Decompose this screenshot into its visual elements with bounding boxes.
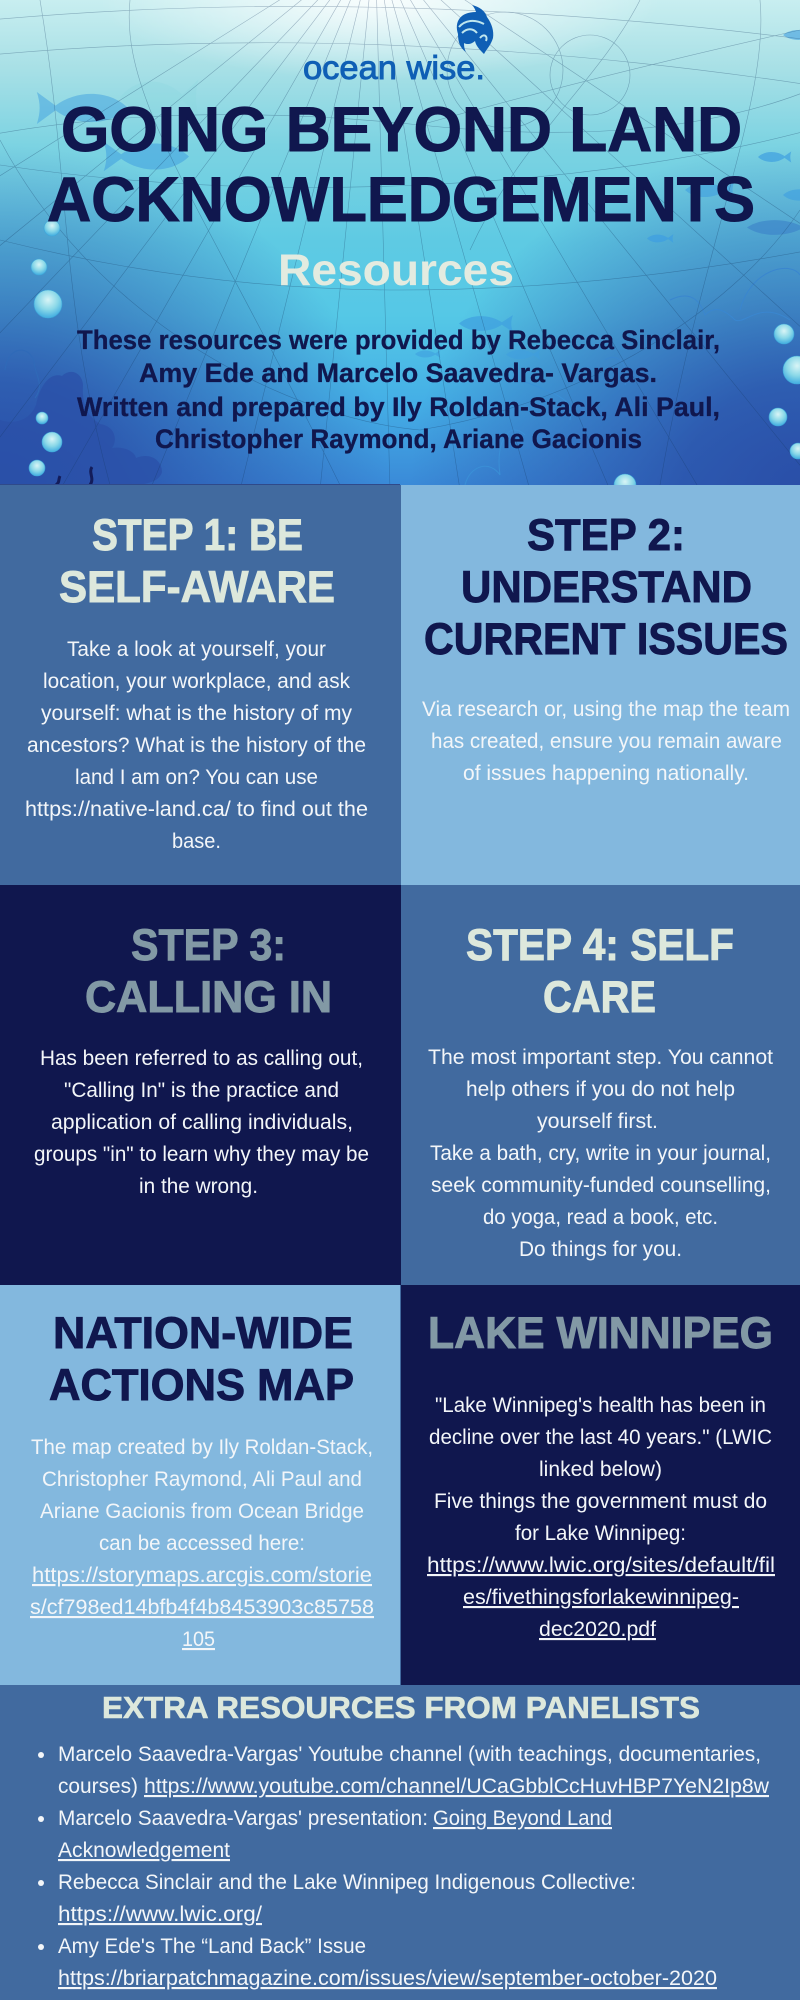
title: ACKNOWLEDGEMENTS [47, 165, 755, 235]
heading: step 3 [85, 921, 332, 1022]
body text: map description and link: Christopher Raymond, Ali Paul and [42, 1467, 362, 1491]
heading: step 3: CALLING IN [85, 973, 332, 1022]
heading: step 1: SELF-AWARE [59, 563, 335, 612]
bullet list of resources: Marcelo Saavedra-Vargas' presentation: [58, 1806, 428, 1830]
body text: step 4: seek community-funded counselling, [431, 1173, 771, 1197]
body text: map description and link: The map created by Ily Roldan-Stack, [31, 1435, 373, 1459]
body text: step 1: yourself: what is the history of my [41, 701, 352, 725]
body text: lake winnipeg [427, 1393, 775, 1641]
body text: map description and link: s/cf798ed14bfb4f4b8453903c85758 [30, 1595, 374, 1619]
heading: lake winnipeg: LAKE WINNIPEG [428, 1309, 773, 1358]
heading: step 4: STEP 4: SELF [466, 921, 734, 970]
body text: step 1: Take a look at yourself, your [67, 637, 326, 661]
logo: Ocean Wise [303, 5, 493, 86]
panel: step 2 [400, 485, 800, 885]
body text: step 1 [25, 637, 368, 853]
body text: map description and link: can be accessed here: [99, 1531, 305, 1555]
bullet list of resources: Acknowledgement [58, 1838, 230, 1862]
heading: step 4: CARE [543, 973, 656, 1022]
body text: step 4 [428, 1045, 773, 1261]
panel: step 3 [0, 885, 400, 1285]
logo wordmark: ocean wise. [303, 49, 485, 86]
bullet list of resources: Amy Ede's The “Land Back” Issue [58, 1934, 366, 1958]
body text: step 3: groups "in" to learn why they may be [34, 1142, 369, 1166]
panel: step 4 [400, 885, 800, 1285]
icon: fish and wave [457, 5, 493, 54]
body text: lake winnipeg: Five things the government must do [434, 1489, 767, 1513]
bubbles [29, 220, 800, 496]
panel: lake winnipeg [400, 1285, 800, 1685]
body text: step 1: https://native-land.ca/ to find out the [25, 797, 368, 821]
heading: step 2 [424, 511, 788, 664]
body text: lake winnipeg: linked below) [539, 1457, 662, 1481]
body text: step 3 [34, 1046, 369, 1198]
heading: nation-wide actions map [49, 1309, 354, 1410]
body text: step 3: "Calling In" is the practice and [64, 1078, 339, 1102]
title: GOING BEYOND LAND [61, 95, 742, 165]
panel: step 1 [0, 484, 400, 885]
heading: step 2: STEP 2: [527, 511, 685, 560]
panel: header banner [0, 0, 800, 496]
body text: map description and link [30, 1435, 374, 1651]
body text: step 4: do yoga, read a book, etc. [483, 1205, 718, 1229]
bullet list of resources: Marcelo Saavedra-Vargas' Youtube channel (with teachings, documentaries, [58, 1742, 761, 1766]
body text: step 4: The most important step. You cannot [428, 1045, 773, 1069]
heading: step 1: STEP 1: BE [92, 511, 303, 560]
coral silhouettes [0, 268, 800, 485]
bullet list of resources: https://www.youtube.com/channel/UCaGbblCcHuvHBP7YeN2Ip8w [144, 1774, 770, 1798]
heading: step 3: STEP 3: [131, 921, 286, 970]
body text: step 1: base. [172, 829, 221, 853]
body text: map description and link: Ariane Gacionis from Ocean Bridge [40, 1499, 364, 1523]
heading: nation-wide actions map: NATION-WIDE [53, 1309, 353, 1358]
body text: step 3: Has been referred to as calling out, [40, 1046, 363, 1070]
body text: lake winnipeg: https://www.lwic.org/sites/default/fil [427, 1553, 775, 1577]
body text: map description and link: https://storymaps.arcgis.com/storie [32, 1563, 372, 1587]
body text: lake winnipeg: "Lake Winnipeg's health has been in [435, 1393, 766, 1417]
bullet list of resources: https://www.lwic.org/ [58, 1902, 262, 1926]
body text: step 1: land I am on? You can use [75, 765, 318, 789]
net lines [0, 0, 800, 490]
body text: lake winnipeg: for Lake Winnipeg: [515, 1521, 686, 1545]
heading: step 4 [466, 921, 734, 1022]
bullet list of resources: Going Beyond Land [433, 1806, 612, 1830]
credits text: Written and prepared by Ily Roldan-Stack, Ali Paul, [77, 392, 720, 422]
heading: step 1 [59, 511, 335, 612]
body text: lake winnipeg: decline over the last 40 years." (LWIC [429, 1425, 772, 1449]
panel: nation-wide actions map [0, 1285, 400, 1685]
credits text: Christopher Raymond, Ariane Gacionis [155, 424, 642, 454]
credits text [77, 325, 720, 454]
heading: nation-wide actions map: ACTIONS MAP [49, 1361, 354, 1410]
body text: step 2: has created, ensure you remain aware [431, 729, 782, 753]
body text: step 4: yourself first. [537, 1109, 658, 1133]
bullet list of resources [38, 1742, 770, 1990]
body text: step 4: help others if you do not help [466, 1077, 735, 1101]
panel: extra resources [0, 1685, 800, 2000]
bullet list of resources: https://briarpatchmagazine.com/issues/view/september-october-2020 [58, 1966, 717, 1990]
bullet list of resources: courses) [58, 1774, 138, 1798]
body text: step 2: of issues happening nationally. [463, 761, 749, 785]
credits text: These resources were provided by Rebecca Sinclair, [77, 325, 720, 355]
body text: step 1: ancestors? What is the history of the [27, 733, 366, 757]
subtitle: Resources: Resources [278, 246, 514, 295]
credits text: Amy Ede and Marcelo Saavedra- Vargas. [139, 358, 657, 388]
body text: step 3: in the wrong. [139, 1174, 258, 1198]
fish silhouettes [37, 29, 800, 360]
body text: step 2: Via research or, using the map the team [422, 697, 790, 721]
body text: step 4: Take a bath, cry, write in your journal, [430, 1141, 771, 1165]
body text: step 3: application of calling individuals, [51, 1110, 353, 1134]
body text: step 2 [422, 697, 790, 785]
body text: lake winnipeg: es/fivethingsforlakewinnipeg- [463, 1585, 739, 1609]
body text: step 4: Do things for you. [519, 1237, 682, 1261]
heading: extra resources: EXTRA RESOURCES FROM PANELISTS [102, 1691, 700, 1725]
bullet list of resources: Rebecca Sinclair and the Lake Winnipeg Indigenous Collective: [58, 1870, 636, 1894]
body text: step 1: location, your workplace, and ask [43, 669, 350, 693]
heading: step 2: UNDERSTAND [461, 563, 752, 612]
body text: map description and link: 105 [182, 1627, 215, 1651]
title [47, 95, 755, 235]
ocean background [0, 0, 800, 485]
body text: lake winnipeg: dec2020.pdf [539, 1617, 656, 1641]
